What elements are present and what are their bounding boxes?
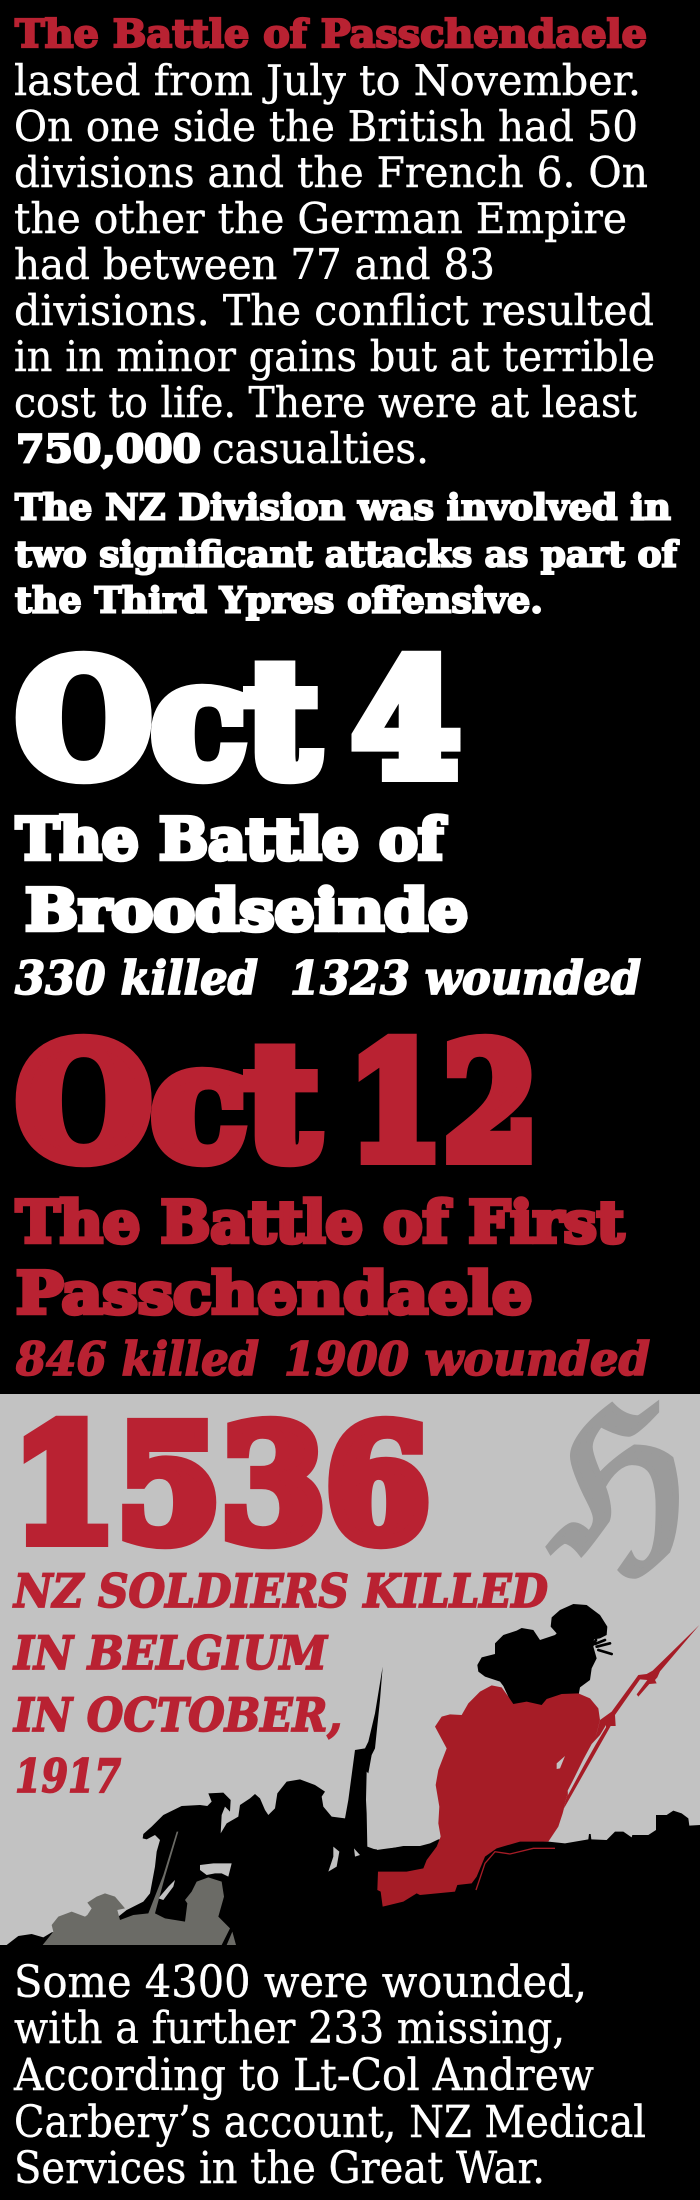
date: Oct 4: 4 [352,628,460,813]
heading: The Battle of Passchendaele: The Battle of Passchendaele [15,11,647,56]
gaps in red soldier [557,1725,606,1795]
closing text block [13,1957,646,2194]
date: Oct 12: 12 [348,1011,538,1196]
intro paragraph: casualties. [212,424,429,473]
section: Oct 12 [15,1011,650,1386]
intro paragraph: 750,000 [16,426,201,471]
intro paragraph: cost to life. There were at least [14,378,637,427]
black soldier being carried [477,1604,607,1707]
gaps between soldiers [158,1847,360,1900]
left soldiers group [0,1667,403,1950]
closing text block: Some 4300 were wounded, [14,1957,587,2008]
red soldier [377,1685,600,1907]
bold paragraph: NZ Division: two significant attacks as part of [15,534,680,576]
intro text block [14,11,680,622]
casualties: 846 killed [15,1332,259,1386]
closing text block: with a further 233 missing, [14,2003,565,2054]
big number 1536: 1536 [12,1393,430,1578]
date: Oct 4: Oct [16,628,318,813]
red trench line [476,1848,555,1890]
ground ridge [367,1811,700,1945]
intro paragraph: lasted from July to November. [14,56,641,105]
section: Oct 4 [15,628,641,1005]
caption: soldiers killed: IN BELGIUM [12,1626,329,1680]
bold paragraph: NZ Division: The NZ Division was involved in [15,488,671,528]
battle name [16,1189,625,1327]
caption: soldiers killed: 1917 [15,1749,121,1803]
bold paragraph: NZ Division [15,488,680,622]
date: Oct 12 [16,1011,538,1196]
intro paragraph: in in minor gains but at terrible [14,332,655,381]
intro paragraph: On one side the British had 50 [14,102,638,151]
casualties: 1900 wounded [284,1332,650,1386]
red rifle and bayonet [563,1625,699,1813]
grey soldiers and rifle [43,1832,236,1945]
intro paragraph: the other the German Empire [14,194,627,243]
right soldiers group [367,1604,700,1945]
date: Oct 4 [16,628,460,813]
intro paragraph [14,56,655,473]
bold paragraph: NZ Division: the Third Ypres offensive. [15,580,543,622]
casualties: 330 killed [15,951,258,1005]
caption: soldiers killed: IN OCTOBER, [12,1688,342,1742]
intro paragraph: divisions. The conflict resulted [14,286,654,335]
closing text block: Carbery’s account, NZ Medical [14,2097,646,2148]
date: Oct 12: Oct [16,1011,318,1196]
logo: Herald blackletter H: ℌ [549,1368,687,1597]
casualties [15,951,641,1005]
casualties: 1323 wounded [290,951,641,1005]
caption: soldiers killed: NZ SOLDIERS KILLED [12,1564,548,1618]
black soldiers [0,1667,403,1950]
battle name: Broodseinde [25,877,468,944]
battle name: The Battle of [16,806,447,873]
closing text block: Services in the Great War. [14,2143,545,2194]
panel: 1536 killed [0,1368,700,1950]
intro paragraph: had between 77 and 83 [14,240,495,289]
battle name: The Battle of First [16,1189,625,1256]
illustration: soldiers silhouette [0,1604,700,1950]
caption: soldiers killed [12,1564,548,1803]
hand fingers [593,1640,612,1654]
intro paragraph: divisions and the French 6. On [14,148,648,197]
casualties [15,1332,650,1386]
closing text block: According to Lt-Col Andrew [13,2050,594,2101]
battle name [16,806,468,944]
battle name: Passchendaele [16,1260,532,1327]
